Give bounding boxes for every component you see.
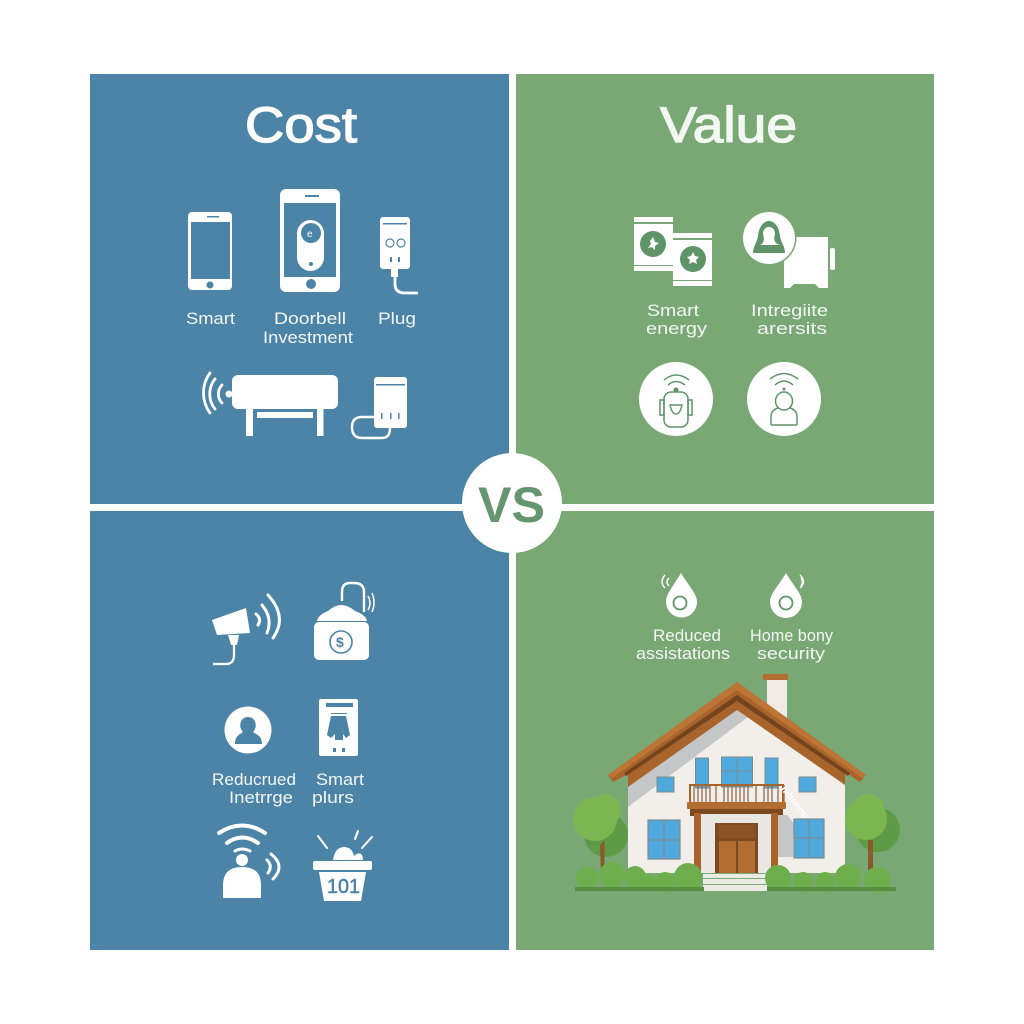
icon: wifi hub bbox=[203, 373, 338, 436]
icon: smartphone bbox=[188, 212, 232, 290]
text: VS: VS bbox=[478, 477, 545, 533]
stair railing bbox=[783, 788, 806, 817]
text: Doorbell Investment: Doorbell bbox=[274, 309, 346, 328]
text: Reducrued Inetrrge: Reducrued bbox=[212, 770, 296, 789]
balcony bbox=[687, 784, 786, 816]
icon: smart energy cards bbox=[634, 217, 712, 286]
front door bbox=[715, 823, 758, 873]
icon: person with device bbox=[742, 210, 835, 288]
text: Plug: Plug bbox=[378, 309, 416, 328]
text: Smart energy bbox=[646, 301, 708, 338]
icon: wifi person bbox=[219, 826, 279, 898]
panel: value bottom bbox=[516, 511, 934, 950]
text: Smart energy: energy bbox=[646, 319, 708, 338]
tree left bbox=[573, 794, 628, 877]
panel: cost top bbox=[90, 74, 509, 504]
icon: smart plug bbox=[380, 217, 418, 293]
text: Smart plurs bbox=[312, 770, 364, 807]
steps bbox=[703, 874, 767, 891]
tree right bbox=[845, 794, 900, 875]
icon: water drop right bbox=[770, 573, 804, 618]
text: Smart energy: Smart bbox=[647, 301, 699, 320]
icon: plug device bbox=[352, 377, 407, 438]
text: Reducrued Inetrrge bbox=[212, 770, 296, 807]
icon: water drop left bbox=[662, 573, 697, 617]
icon: money bag: $ bbox=[336, 634, 344, 650]
divider: cross lines and VS badge bbox=[462, 453, 562, 553]
icon: money bag bbox=[314, 583, 374, 660]
icon: basket 101 bbox=[313, 831, 372, 901]
illustration: house bbox=[573, 674, 900, 893]
text: Home bony security bbox=[750, 626, 833, 663]
upper windows bbox=[657, 757, 816, 792]
icon: smart doorbell on phone bbox=[280, 189, 340, 292]
icon: smart doorbell on phone: e bbox=[307, 229, 313, 240]
chimney bbox=[763, 674, 788, 719]
text: Smart: Smart bbox=[186, 309, 235, 328]
porch posts bbox=[694, 813, 778, 873]
icon: phone with plug bbox=[319, 699, 358, 756]
heading: Cost: Cost bbox=[245, 97, 357, 153]
roof bbox=[608, 682, 866, 787]
text: Intregiite arersits: arersits bbox=[757, 319, 827, 338]
text: Smart plurs: Smart bbox=[316, 770, 364, 789]
text: Doorbell Investment bbox=[263, 309, 353, 347]
panel: value top bbox=[516, 74, 934, 504]
text: Intregiite arersits: Intregiite bbox=[751, 301, 828, 320]
walls bbox=[628, 710, 845, 873]
text: Reducrued Inetrrge: Inetrrge bbox=[229, 788, 293, 807]
icon: security camera bbox=[212, 595, 279, 664]
text: Reduced assistations bbox=[636, 626, 730, 663]
icon: wifi robot circle bbox=[639, 362, 713, 436]
text: Home bony security: security bbox=[757, 644, 826, 663]
text: Home bony security: Home bony bbox=[750, 626, 833, 645]
icon: wifi person circle bbox=[747, 362, 821, 436]
shade under balcony bbox=[701, 814, 771, 873]
bushes and lawn bbox=[575, 862, 896, 893]
text: Intregiite arersits bbox=[751, 301, 828, 338]
heading: Value: Value bbox=[660, 97, 797, 153]
icon: person circle bbox=[224, 706, 272, 754]
text: Reduced assistations: Reduced bbox=[653, 626, 721, 645]
lower windows bbox=[648, 819, 824, 859]
panel: cost bottom bbox=[90, 511, 509, 950]
icon: basket 101: 101 bbox=[327, 876, 360, 898]
text: Reduced assistations: assistations bbox=[636, 644, 730, 663]
text: Doorbell Investment: Investment bbox=[263, 328, 353, 347]
text: Smart plurs: plurs bbox=[312, 788, 354, 807]
